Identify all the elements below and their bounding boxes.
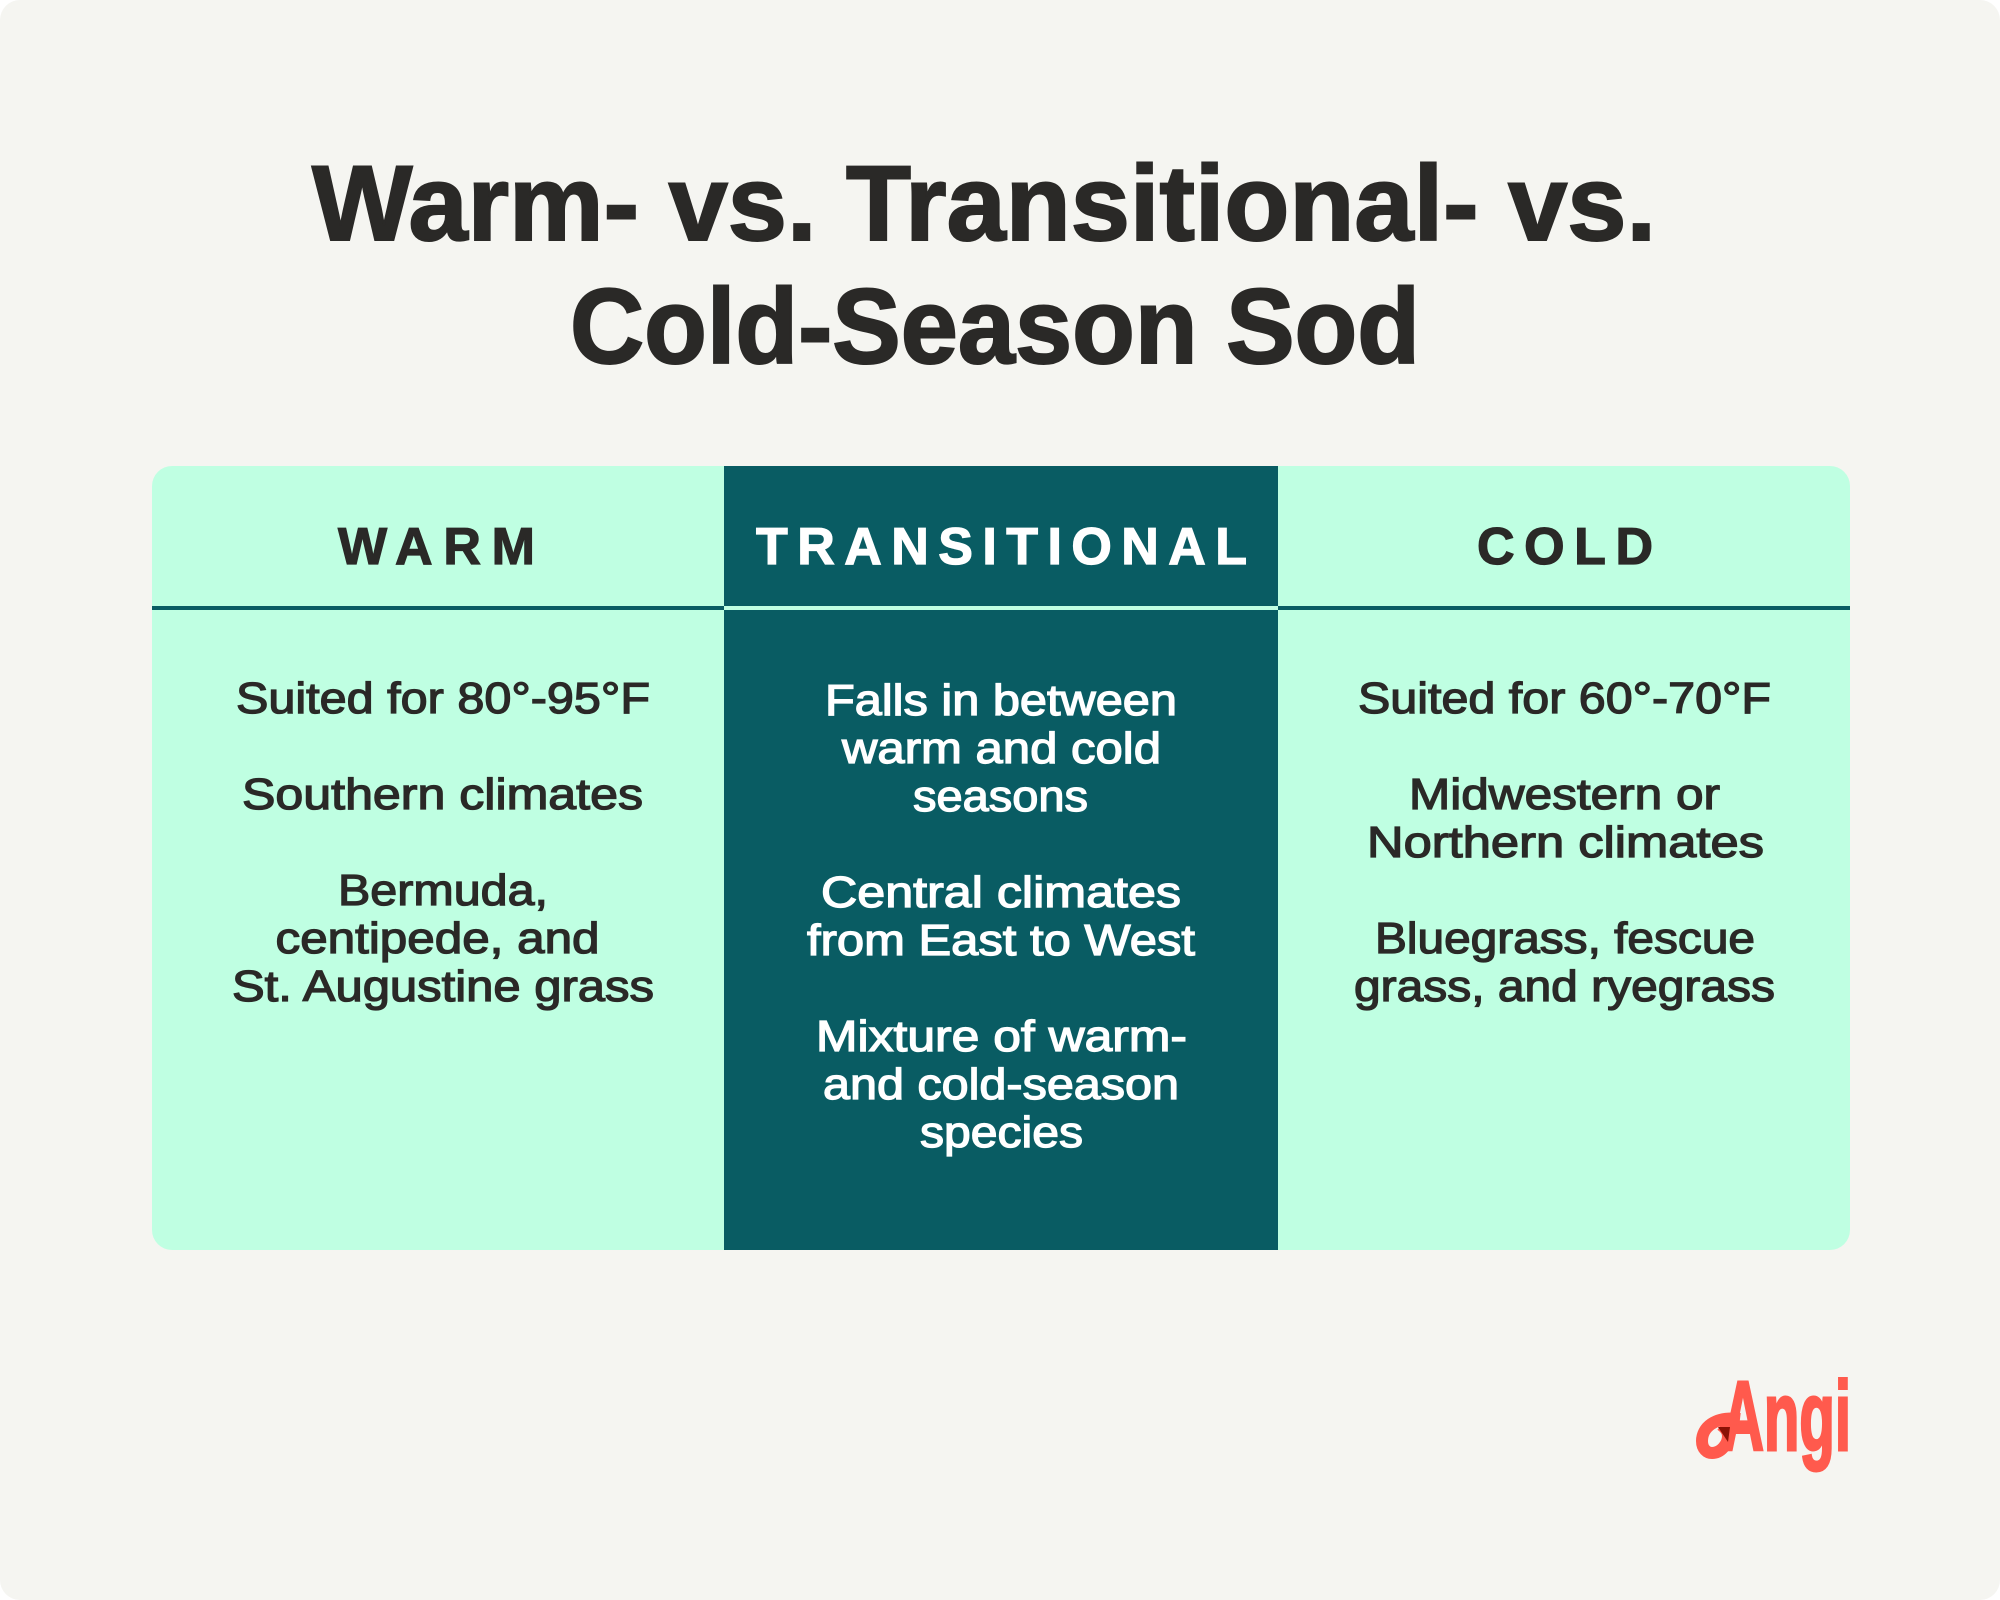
warm list: centipede, and [276, 914, 600, 963]
transitional list [807, 676, 1195, 1157]
transitional list: Central climates [821, 868, 1181, 917]
transitional list: warm and cold [841, 724, 1161, 773]
cold list: grass, and ryegrass [1354, 962, 1775, 1011]
title: Warm- vs. Transitional- vs. [312, 143, 1656, 263]
warm heading: WARM [338, 518, 535, 576]
transitional list: Mixture of warm- [816, 1012, 1187, 1061]
cold divider [1278, 606, 1850, 610]
warm list [232, 674, 654, 1011]
title: Cold-Season Sod [570, 266, 1420, 386]
warm list: St. Augustine grass [232, 962, 654, 1011]
transitional list: species [920, 1108, 1083, 1157]
panel: warm [152, 518, 724, 1011]
logo: Angi [1702, 1361, 1851, 1471]
transitional list: from East to West [807, 916, 1195, 965]
cold list: Midwestern or [1409, 770, 1720, 819]
warm list: Southern climates [242, 770, 643, 819]
warm list: Bermuda, [338, 866, 548, 915]
cold list [1354, 674, 1775, 1011]
comparison table [152, 466, 1850, 1250]
table background [152, 466, 1850, 1250]
warm list: Suited for 80°-95°F [236, 674, 650, 723]
transitional list: seasons [913, 772, 1088, 821]
transitional list: and cold-season [823, 1060, 1179, 1109]
logo: Angi: Angi [1722, 1361, 1851, 1471]
title [312, 143, 1656, 386]
transitional divider [724, 606, 1278, 610]
panel: cold [1278, 518, 1850, 1011]
panel: transitional [724, 466, 1278, 1250]
cold list: Northern climates [1367, 818, 1764, 867]
cold list: Suited for 60°-70°F [1358, 674, 1771, 723]
warm divider [152, 606, 724, 610]
cold list: Bluegrass, fescue [1375, 914, 1755, 963]
cold heading: COLD [1477, 518, 1653, 576]
transitional heading: TRANSITIONAL [756, 518, 1247, 576]
transitional column background [724, 466, 1278, 1250]
transitional list: Falls in between [825, 676, 1177, 725]
